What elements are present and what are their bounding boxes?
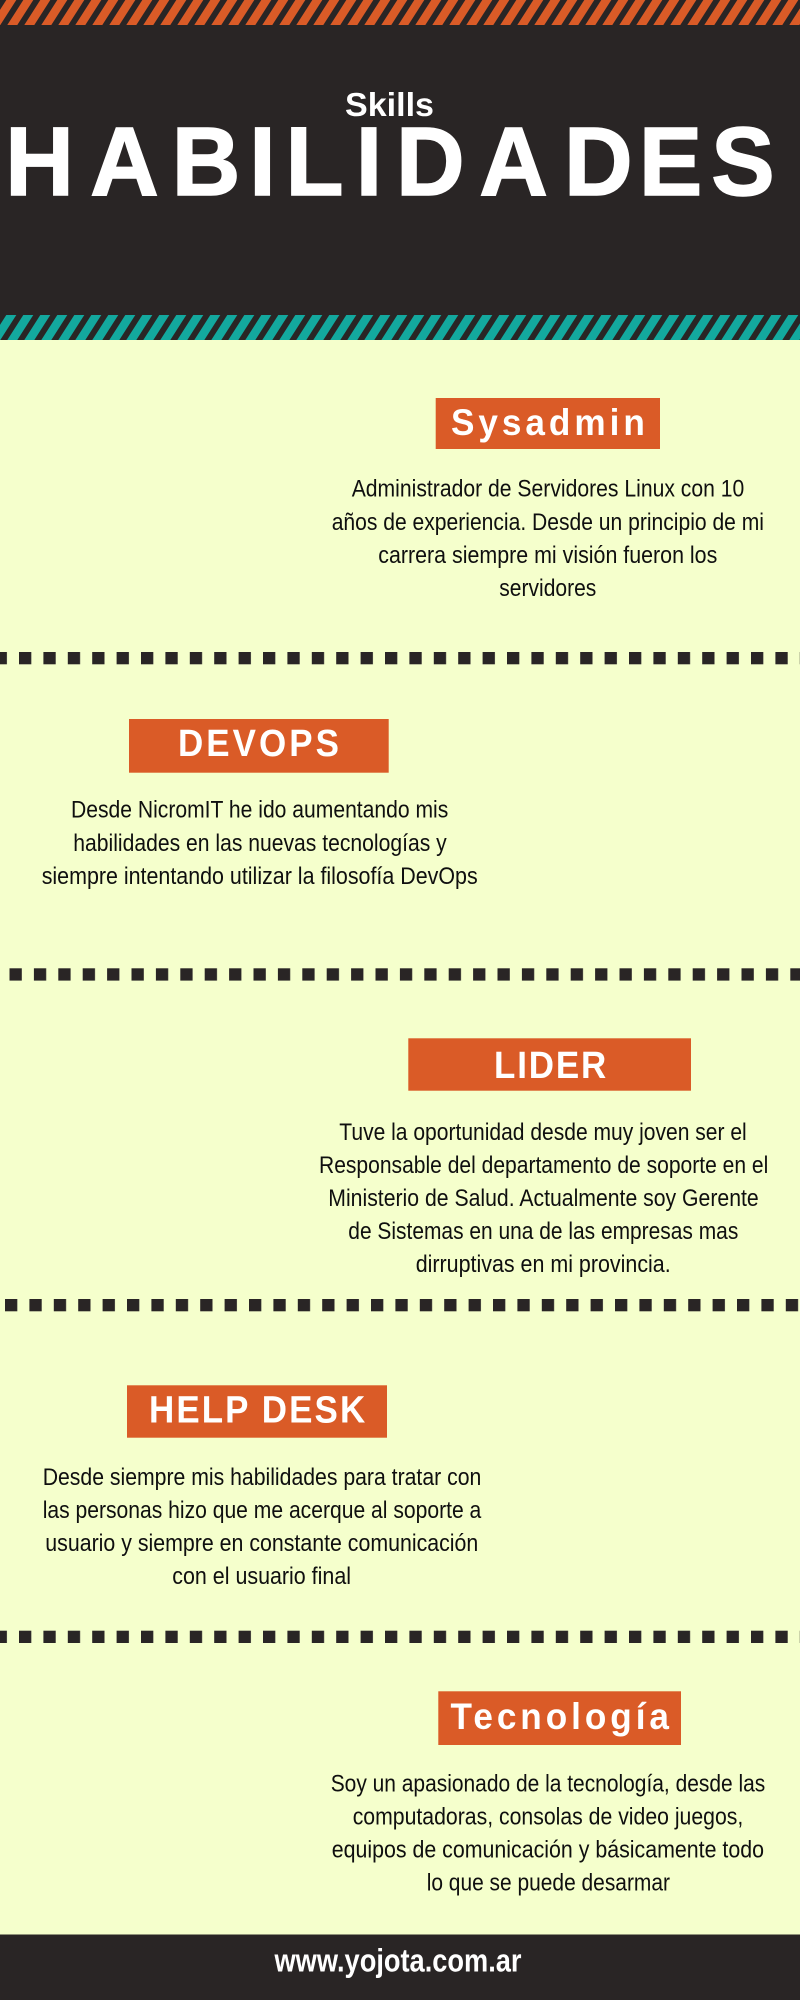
- badge: LIDER: LIDER: [494, 1044, 606, 1086]
- panel: Sysadmin: [332, 398, 764, 602]
- badge: DEVOPS: [129, 719, 389, 773]
- badge: HELP DESK: [127, 1385, 387, 1438]
- text block: Tecnologia: [331, 1770, 765, 1896]
- text block: Lider: [319, 1119, 768, 1278]
- subtitle: Skills: [345, 86, 434, 123]
- panel: Lider: [319, 1038, 768, 1278]
- text block: DevOps: Desde NicromIT he ido aumentando mis: [71, 797, 448, 824]
- text block: DevOps: habilidades en las nuevas tecnologías y: [73, 830, 447, 857]
- text block: DevOps: siempre intentando utilizar la filosofía DevOps: [42, 863, 478, 890]
- text block: Sysadmin: [332, 476, 764, 602]
- badge: Sysadmin: Sysadmin: [451, 401, 645, 443]
- teal striped band: [0, 315, 800, 340]
- footer url: www.yojota.com.ar: [274, 1943, 522, 1979]
- text block: Sysadmin: servidores: [499, 575, 596, 602]
- text block: DevOps: [42, 797, 478, 890]
- text block: Lider: dirruptivas en mi provincia.: [416, 1251, 671, 1278]
- badge: DEVOPS: DEVOPS: [178, 722, 339, 764]
- badge: Tecnologia: Tecnología: [450, 1695, 670, 1737]
- panel: Help Desk: [43, 1385, 482, 1590]
- footer: [0, 1934, 800, 2000]
- text block: Help Desk: [43, 1464, 482, 1590]
- text block: Help Desk: usuario y siempre en constante comunicación: [45, 1530, 478, 1557]
- text block: Sysadmin: carrera siempre mi visión fueron los: [378, 542, 717, 569]
- badge: HELP DESK: HELP DESK: [149, 1388, 366, 1431]
- text block: Tecnologia: computadoras, consolas de video juegos,: [353, 1803, 743, 1830]
- text block: Help Desk: Desde siempre mis habilidades para tratar con: [43, 1464, 481, 1491]
- text block: Lider: Tuve la oportunidad desde muy joven ser el: [339, 1119, 747, 1146]
- header panel: [0, 0, 800, 340]
- orange striped band: [0, 0, 800, 25]
- panel: DevOps: [42, 719, 478, 890]
- text block: Sysadmin: Administrador de Servidores Linux con 10: [352, 476, 744, 503]
- panel: Tecnologia: [331, 1691, 765, 1896]
- text block: Lider: de Sistemas en una de las empresas mas: [348, 1218, 738, 1245]
- badge: LIDER: [408, 1038, 691, 1091]
- text block: Help Desk: con el usuario final: [172, 1563, 351, 1590]
- text block: Help Desk: las personas hizo que me acerque al soporte a: [43, 1497, 482, 1524]
- title: HABILIDADES: [5, 108, 775, 216]
- text block: Tecnologia: lo que se puede desarmar: [427, 1869, 670, 1896]
